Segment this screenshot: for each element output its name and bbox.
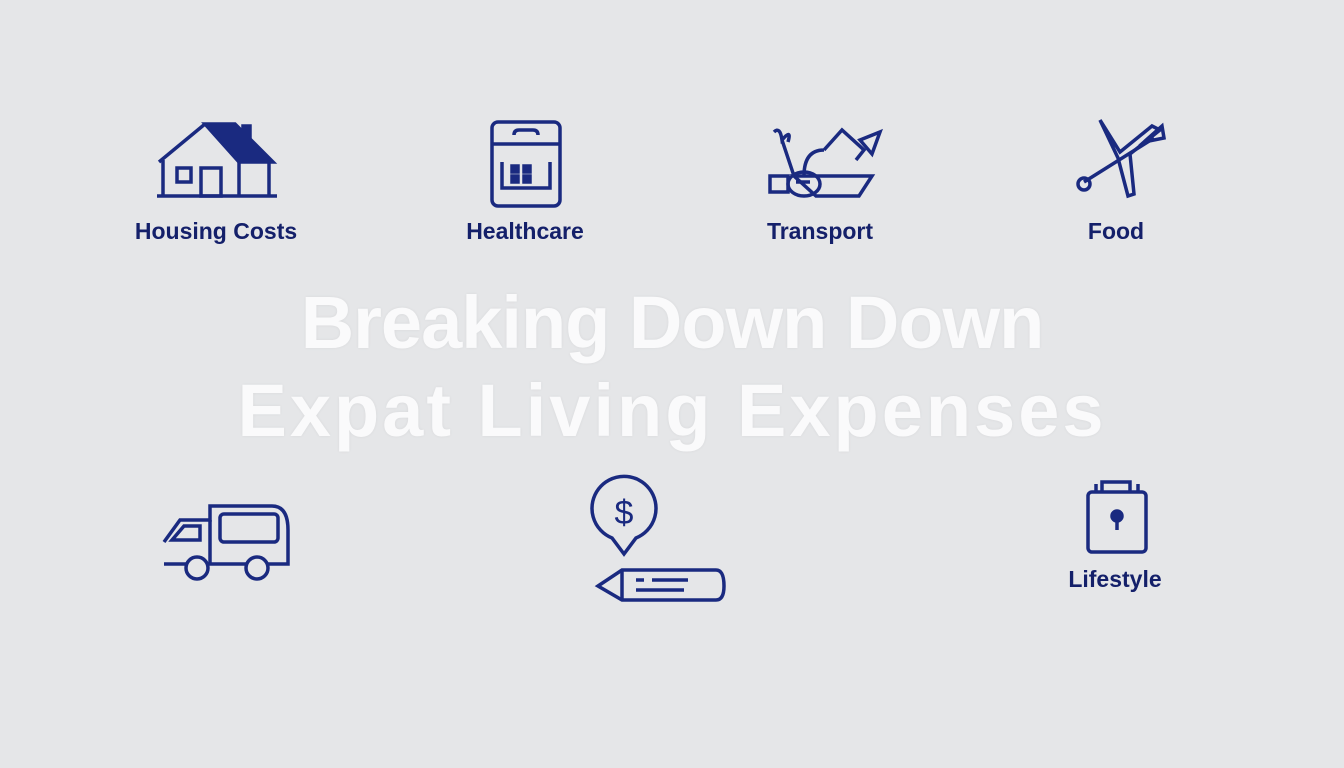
title: Breaking Down Down: [301, 281, 1043, 364]
label: Lifestyle: Lifestyle: [1068, 566, 1162, 592]
icon: basket: [768, 128, 883, 198]
label: Healthcare: Healthcare: [466, 218, 584, 244]
icon: dollar pin and pencil: [590, 474, 726, 602]
label: Transport: Transport: [767, 218, 873, 244]
label: Food: Food: [1088, 218, 1144, 244]
icon: van: [162, 504, 290, 581]
icon: lifestyle bag: [1086, 480, 1148, 554]
icon: healthcare box: [490, 120, 562, 208]
icon: house: [157, 122, 278, 198]
title: Expat Living Expenses: [237, 369, 1107, 452]
label: Housing Costs: Housing Costs: [135, 218, 297, 244]
icon: airplane: [1076, 119, 1166, 198]
title: [237, 281, 1107, 452]
icon: dollar pin and pencil: $: [615, 494, 634, 532]
